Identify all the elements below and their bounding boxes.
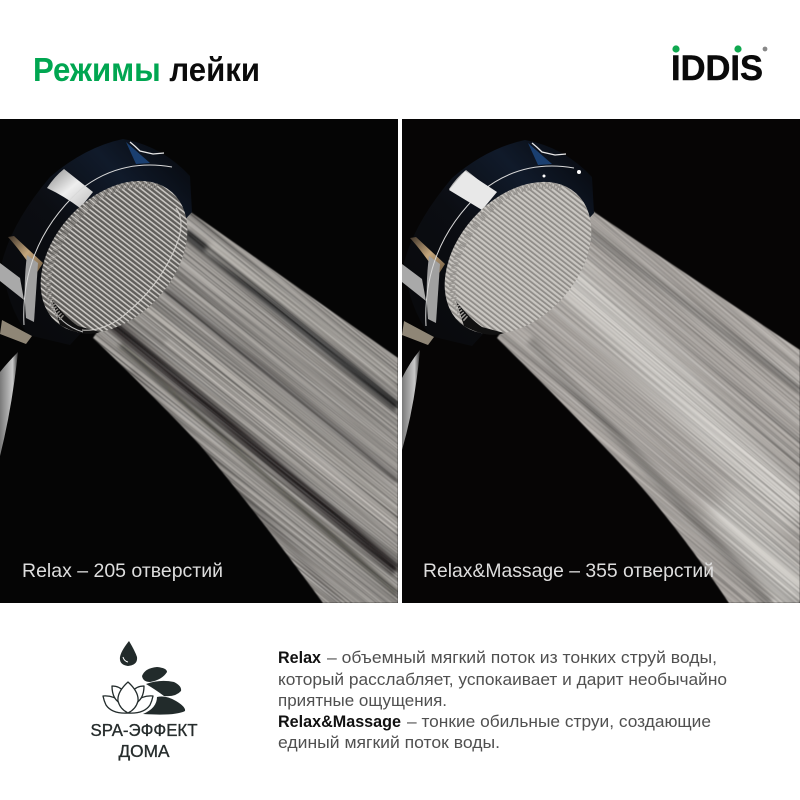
shower head chrome bbox=[402, 140, 594, 346]
spray: Relax streams bbox=[92, 212, 398, 603]
icon: water drop bbox=[120, 641, 137, 666]
title: Режимы лейки bbox=[33, 51, 260, 88]
icon caption: SPA effect at home bbox=[90, 720, 198, 761]
spray: Relax&Massage streams bbox=[496, 211, 800, 603]
text block: mode descriptions: – объемный мягкий поток из тонких струй воды, bbox=[327, 649, 717, 667]
text block: mode descriptions bbox=[278, 649, 727, 752]
text block: mode descriptions: приятные ощущения. bbox=[278, 692, 447, 710]
text block: mode descriptions: Relax&Massage bbox=[278, 713, 401, 731]
handle bbox=[0, 352, 18, 456]
text block: mode descriptions: – тонкие обильные струи, создающие bbox=[407, 713, 711, 731]
caption: Relax holes: Relax – 205 отверстий bbox=[22, 560, 223, 582]
text block: mode descriptions: единый мягкий поток воды. bbox=[278, 734, 500, 752]
icon: stones bbox=[142, 667, 185, 715]
panel: Relax photo bbox=[0, 119, 398, 603]
icon caption: SPA effect at home: ДОМА bbox=[118, 741, 170, 761]
handle bbox=[402, 350, 420, 450]
logo: IDDIS: IDDIS bbox=[671, 49, 763, 88]
panel: Relax&Massage photo bbox=[402, 119, 800, 603]
caption: Relax&Massage holes: Relax&Massage – 355 отверстий bbox=[423, 560, 714, 582]
icon: lotus bbox=[103, 682, 153, 713]
icon: SPA water drop, lotus and stones bbox=[103, 641, 185, 715]
shower head chrome bbox=[0, 139, 192, 344]
text block: mode descriptions: который расслабляет, успокаивает и дарит необычайно bbox=[278, 671, 727, 689]
icon caption: SPA effect at home: SPA-ЭФФЕКТ bbox=[90, 720, 198, 740]
text block: mode descriptions: Relax bbox=[278, 649, 322, 667]
